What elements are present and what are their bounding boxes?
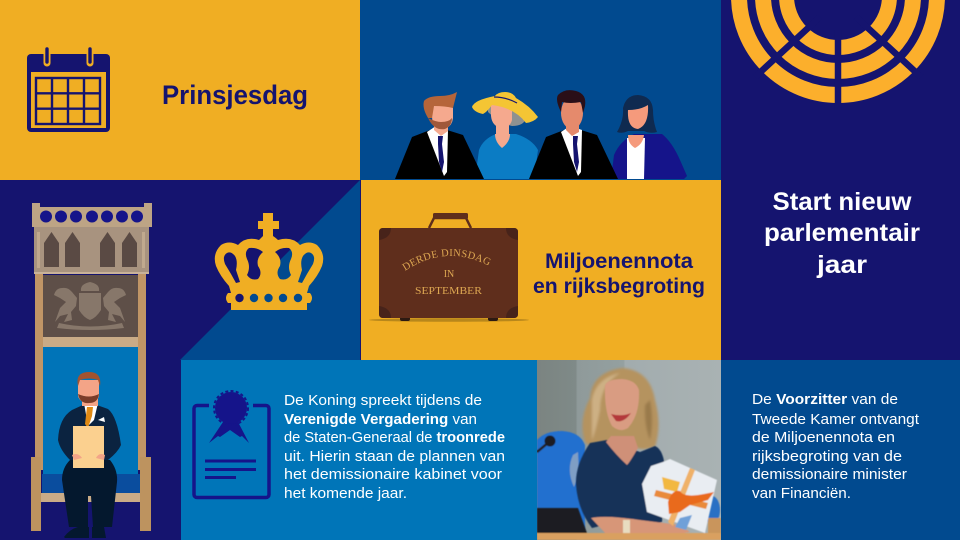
text block: troonrede: De Koning spreekt tijdens de	[284, 393, 482, 409]
coat of arms	[54, 282, 126, 330]
text block: troonrede: het komende jaar.	[284, 486, 407, 502]
suitcase label: IN	[444, 269, 454, 280]
panel: troonrede	[181, 360, 538, 540]
panel: Voorzitter	[721, 360, 960, 540]
text block: troonrede: de Staten-Generaal de troonrede	[284, 430, 505, 446]
text block: troonrede: uit. Hierin staan de plannen van	[284, 449, 505, 465]
heading: Start nieuw parlementair jaar: jaar	[816, 251, 867, 279]
suitcase label: DERDE DINSDAG	[402, 249, 491, 271]
heading: Miljoenennota en rijksbegroting: en rijksbegroting	[533, 275, 705, 298]
panel: throne	[31, 203, 152, 538]
text block: Voorzitter: de Miljoenennota en	[752, 430, 895, 446]
suitcase label: SEPTEMBER	[415, 286, 482, 297]
person: dark-haired man	[529, 90, 618, 179]
heading: Start nieuw parlementair jaar	[764, 188, 920, 279]
text block: Voorzitter: De Voorzitter van de	[752, 392, 898, 408]
icon: crown	[215, 213, 323, 310]
heading: Miljoenennota en rijksbegroting: Miljoenennota	[545, 250, 693, 273]
panel: crown	[180, 180, 360, 360]
heading: Start nieuw parlementair jaar: Start nieuw	[772, 188, 912, 216]
text block: troonrede: Verenigde Vergadering van	[284, 412, 477, 428]
panel: Prinsjesdag	[0, 0, 360, 180]
photo: chair of parliament	[537, 360, 721, 540]
icon: parliament seating	[739, 0, 937, 110]
icon: suitcase	[369, 213, 529, 322]
person: man with beard	[395, 92, 484, 179]
panel: Miljoenennota	[361, 180, 721, 360]
heading: Prinsjesdag: Prinsjesdag	[162, 80, 308, 110]
king figure	[58, 372, 121, 538]
text block: troonrede	[284, 393, 505, 502]
text block: Voorzitter: van Financiën.	[752, 486, 851, 502]
text block: Voorzitter: demissionaire minister	[752, 467, 907, 483]
text block: Voorzitter: rijksbegroting van de	[752, 449, 902, 465]
text block: Voorzitter	[752, 392, 919, 502]
panel: people	[360, 0, 721, 180]
icon: calendar	[27, 49, 110, 132]
heading: Start nieuw parlementair jaar: parlementair	[764, 219, 920, 247]
throne	[31, 203, 152, 531]
text block: Voorzitter: Tweede Kamer ontvangt	[752, 412, 919, 428]
text block: troonrede: het demissionaire kabinet voor	[284, 467, 502, 483]
heading: Miljoenennota en rijksbegroting	[533, 250, 705, 298]
panel: parliament column	[721, 0, 960, 360]
person: woman in blue jacket	[611, 95, 687, 179]
person: woman in yellow hat	[472, 92, 538, 179]
icon: certificate	[194, 391, 269, 498]
suitcase label	[402, 249, 491, 297]
crown pearls	[235, 294, 302, 302]
